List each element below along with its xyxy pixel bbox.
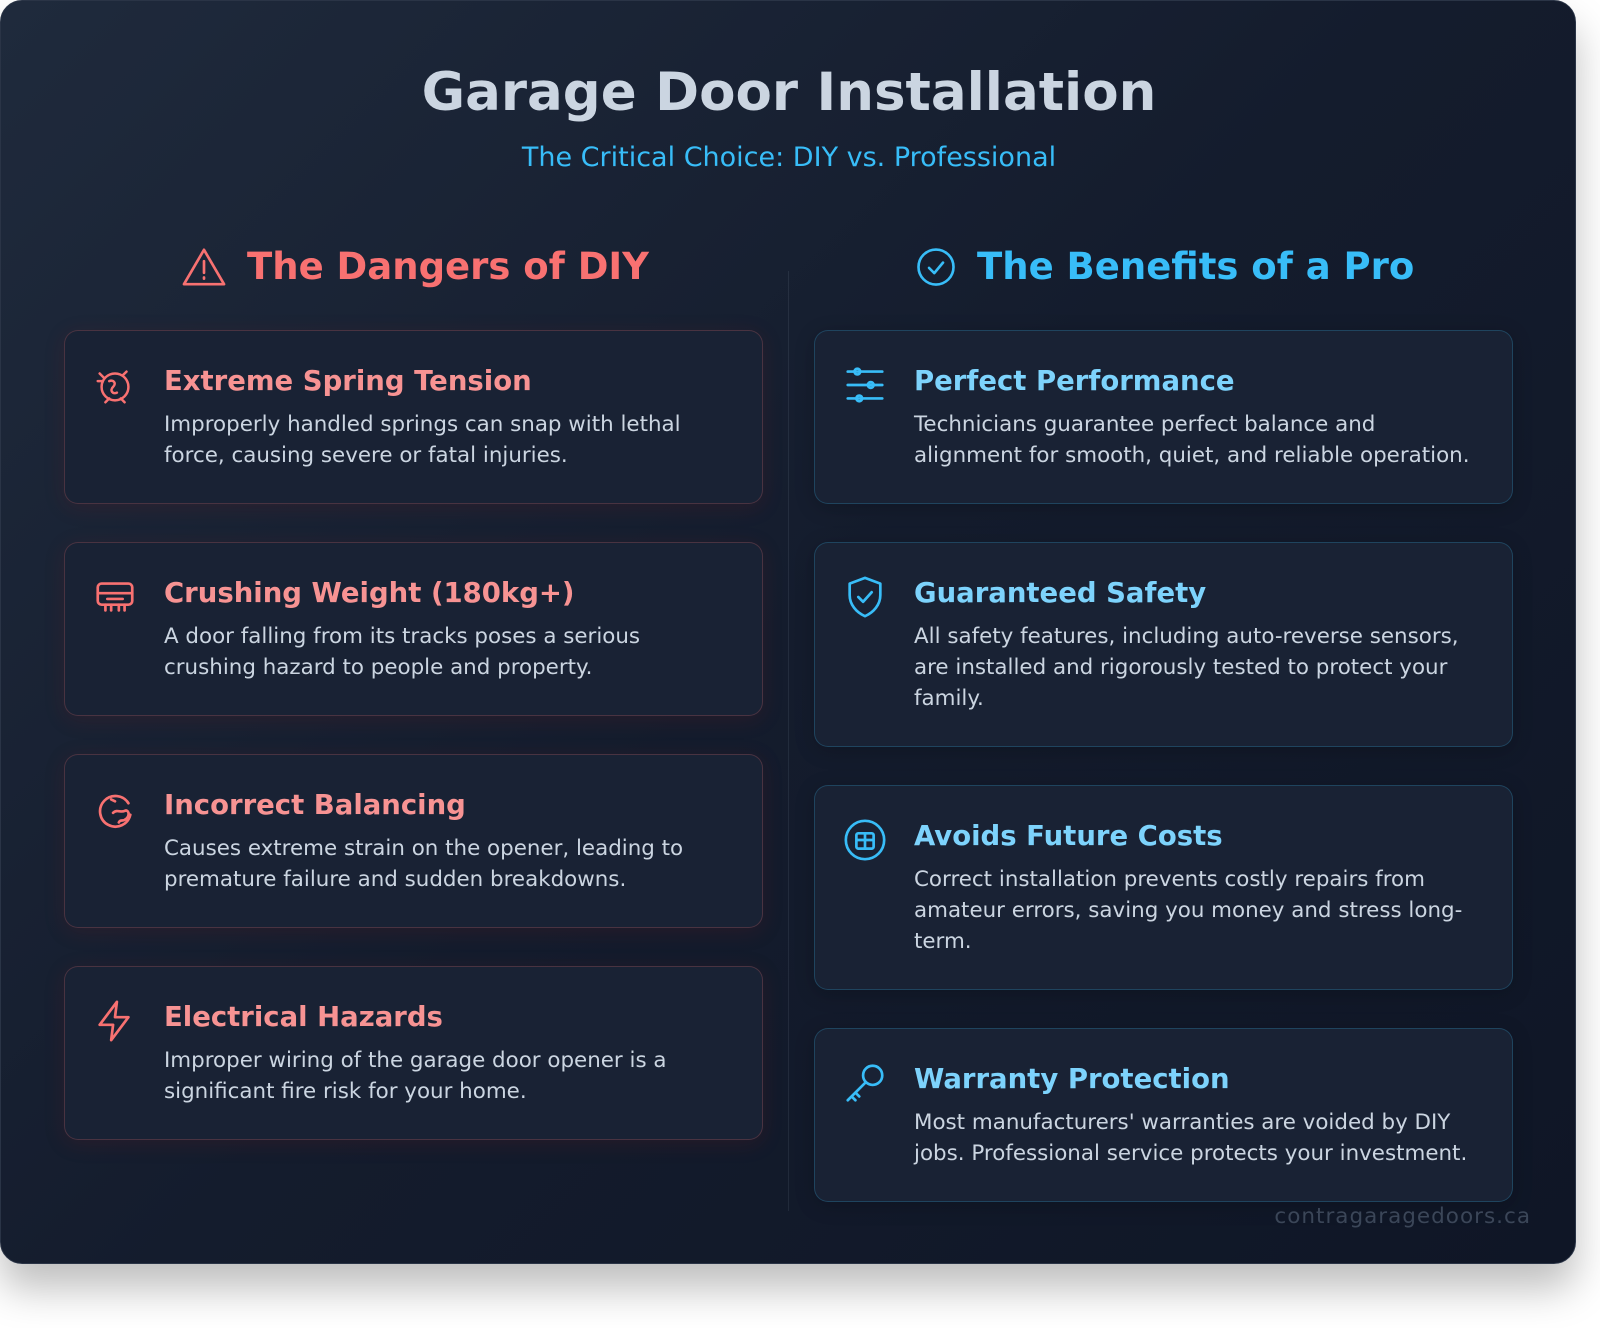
card: warranty: [814, 1028, 1513, 1202]
card: balancing: Causes extreme strain on the opener, leading to premature failure and sudden breakdowns.: [164, 836, 683, 892]
heading: benefits: The Benefits of a Pro: [977, 245, 1414, 288]
card: balancing: Incorrect Balancing: [164, 789, 466, 821]
card: electrical: Electrical Hazards: [164, 1001, 443, 1033]
card: electrical: Improper wiring of the garage door opener is a significant fire risk for your home.: [164, 1048, 667, 1104]
card: costs: Avoids Future Costs: [914, 820, 1223, 852]
card: spring tension: [64, 330, 763, 504]
card: performance: Technicians guarantee perfect balance and alignment for smooth, quiet, and reliable operation.: [914, 412, 1470, 468]
icon: coin: [844, 820, 886, 860]
icon: lightning: [98, 1000, 130, 1042]
card: crushing weight: Crushing Weight (180kg+): [164, 577, 574, 609]
divider: [788, 271, 789, 1211]
icon: spring: [96, 370, 130, 404]
title: Garage Door Installation: [422, 62, 1156, 123]
card: balancing: [64, 754, 763, 928]
card: warranty: Most manufacturers' warranties are voided by DIY jobs. Professional service protects your investment.: [914, 1110, 1467, 1166]
card: safety: [814, 542, 1513, 747]
heading: dangers: The Dangers of DIY: [247, 245, 649, 288]
card: electrical: [64, 966, 763, 1140]
card: crushing weight: A door falling from its tracks poses a serious crushing hazard to people and property.: [164, 624, 640, 680]
icon: door: [96, 582, 134, 612]
footer: website: contragaragedoors.ca: [1274, 1204, 1531, 1229]
card: costs: Correct installation prevents costly repairs from amateur errors, saving you money and stress long-term.: [914, 867, 1462, 954]
card: costs: [814, 785, 1513, 990]
icon: shield: [848, 576, 882, 618]
icon: balance: [98, 794, 132, 828]
card: warranty: Warranty Protection: [914, 1063, 1230, 1095]
card: spring tension: Extreme Spring Tension: [164, 365, 532, 397]
card: safety: Guaranteed Safety: [914, 577, 1206, 609]
card: safety: All safety features, including auto-reverse sensors, are installed and rigorously tested to protect your family.: [914, 624, 1459, 711]
icon: key: [846, 1064, 884, 1102]
icon: sliders: [846, 367, 884, 403]
card: performance: [814, 330, 1513, 504]
card: spring tension: Improperly handled springs can snap with lethal force, causing severe or fatal injuries.: [164, 412, 681, 468]
subtitle: The Critical Choice: DIY vs. Professional: [522, 142, 1056, 173]
card: performance: Perfect Performance: [914, 365, 1235, 397]
card: crushing weight: [64, 542, 763, 716]
